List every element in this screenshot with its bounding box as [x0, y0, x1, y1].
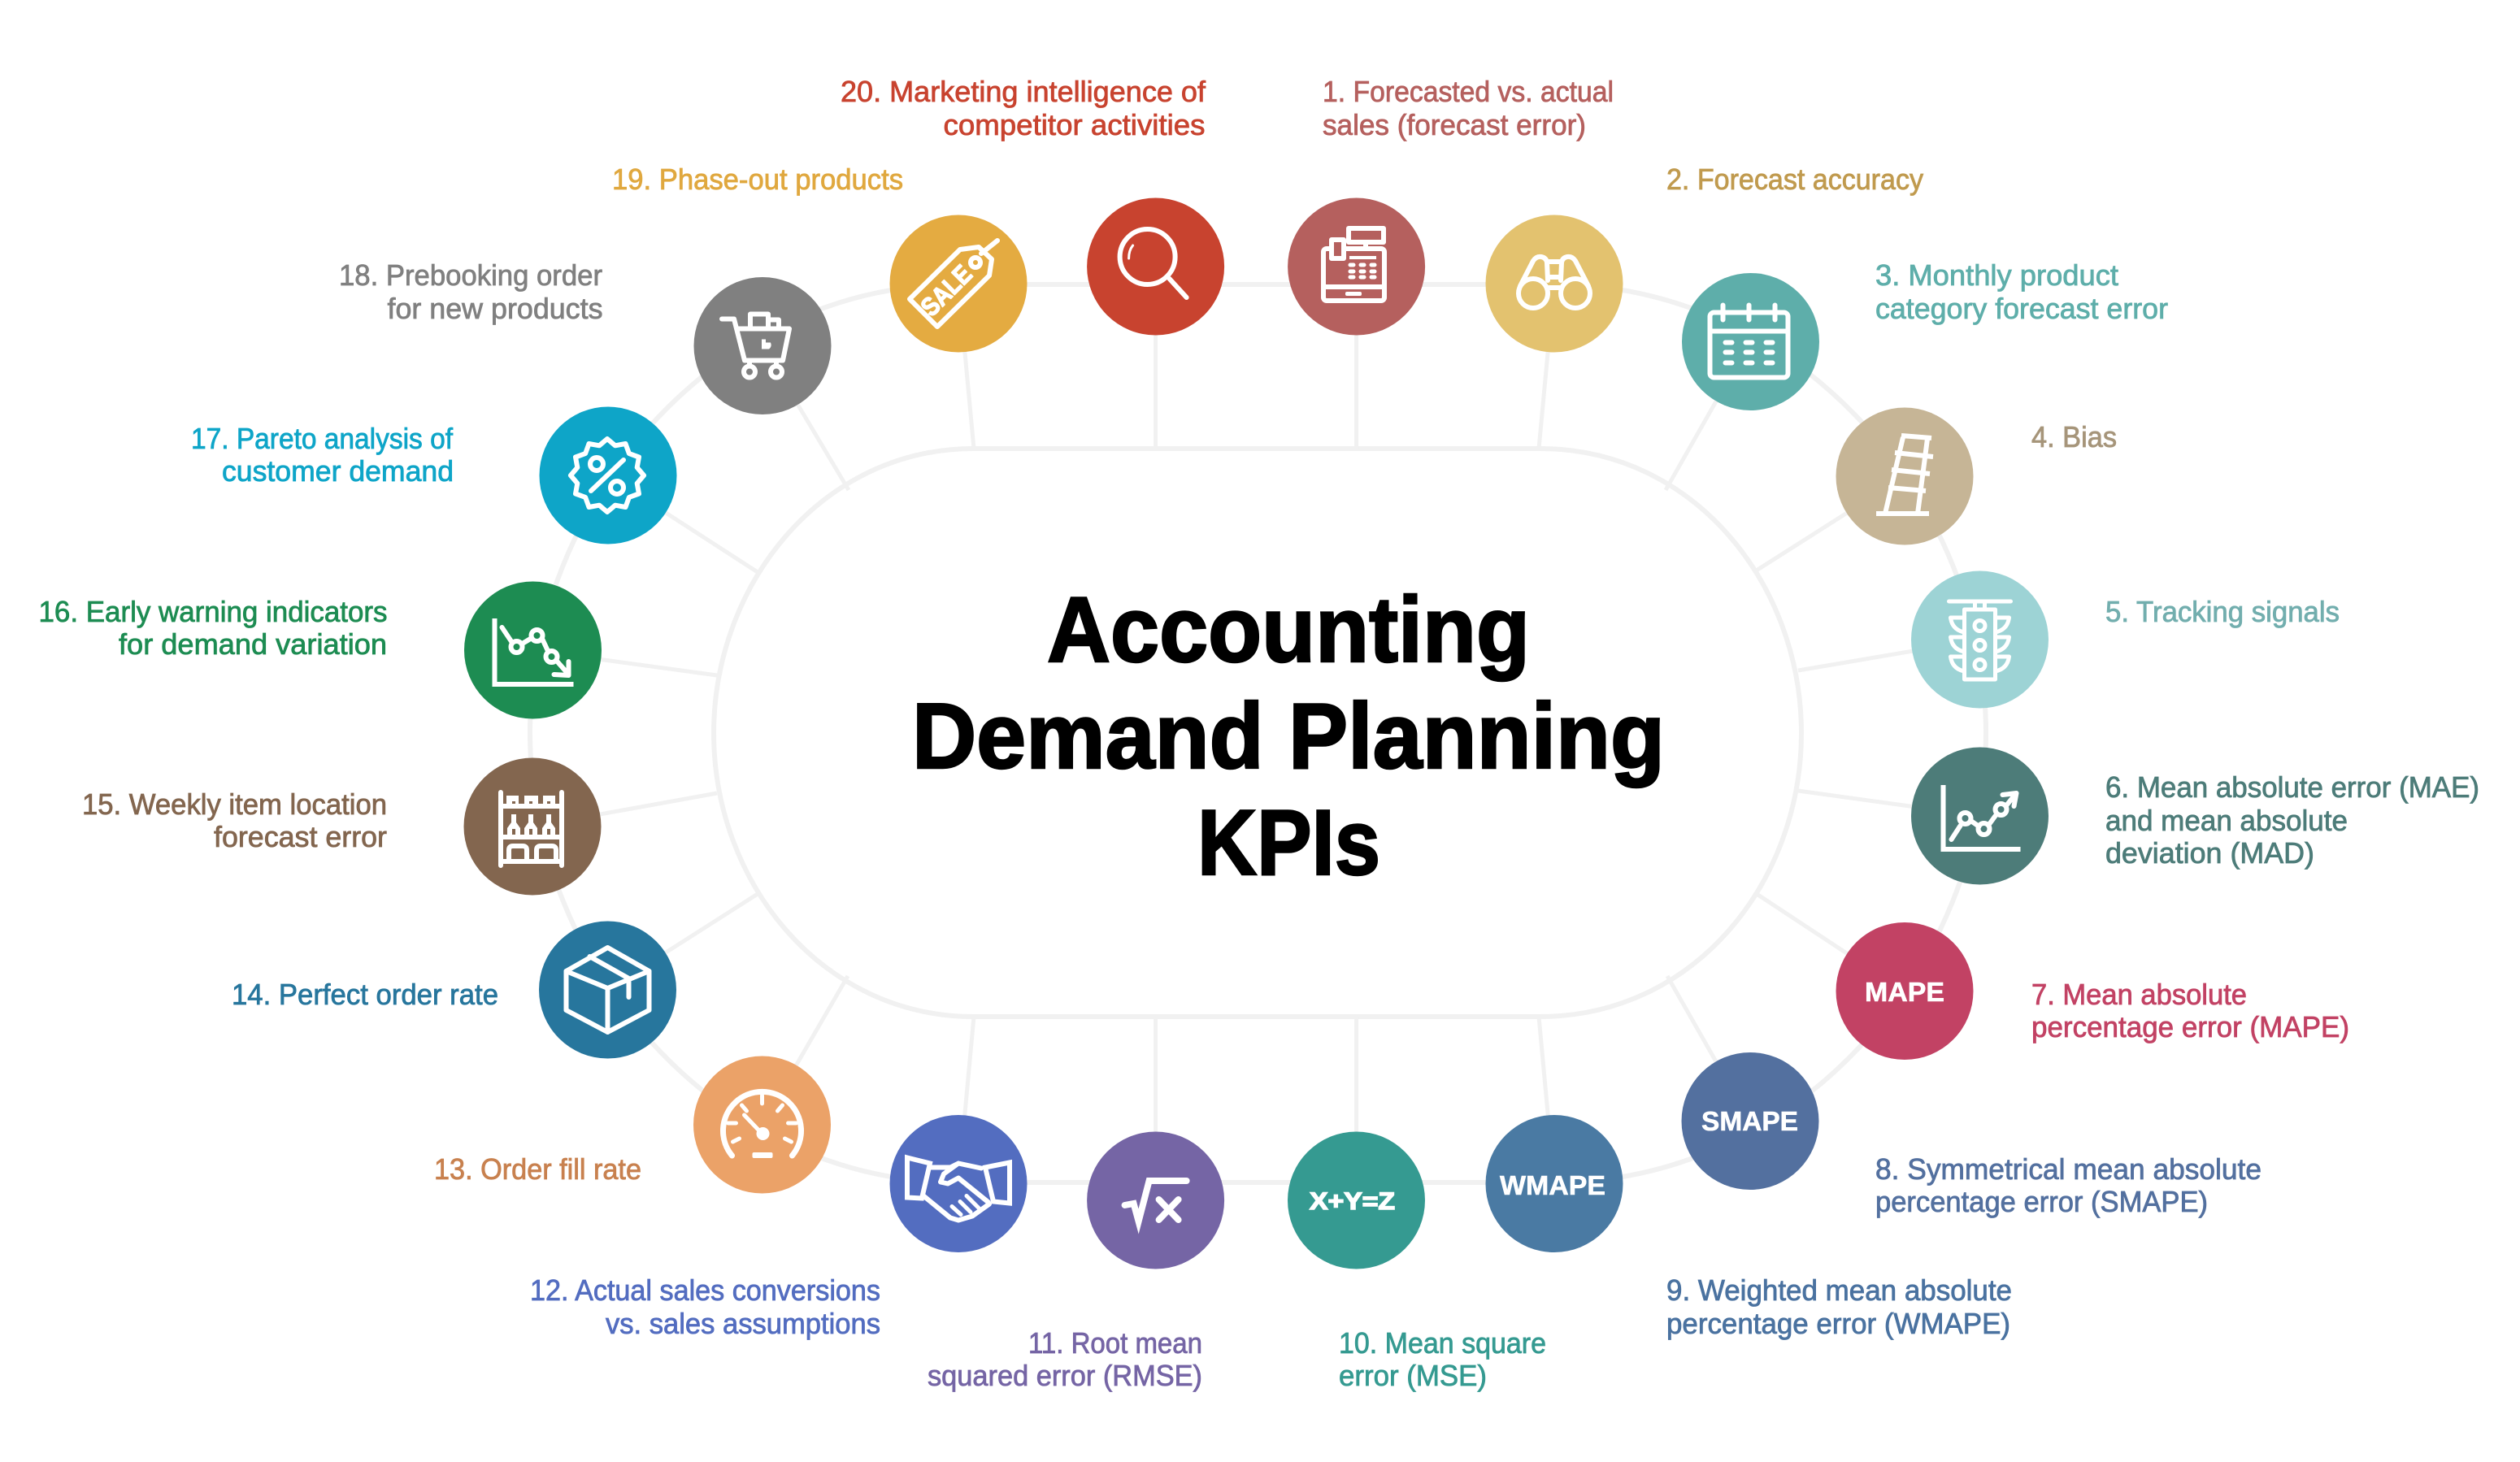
KPI 7: MAPE — [1836, 922, 2349, 1060]
icon: sale tag: SALE — [915, 259, 978, 322]
icon: rising line chart — [1943, 785, 2021, 849]
label: deviation (MAD) — [2105, 836, 2314, 870]
icon: speedometer — [723, 1091, 802, 1158]
label: sales (forecast error) — [1323, 108, 1586, 141]
label — [841, 75, 1206, 141]
icon: magnifying glass — [1120, 229, 1187, 297]
title: Demand Planning — [912, 685, 1665, 788]
label: 18. Prebooking order — [339, 258, 602, 292]
badge text: X+Y=Z: X+Y=Z — [1310, 1188, 1395, 1215]
badge text: SMAPE: SMAPE — [1701, 1106, 1798, 1136]
badge text: WMAPE: WMAPE — [1500, 1170, 1605, 1200]
KPI 19: phase-out products — [612, 163, 1028, 353]
KPI 2: forecast accuracy — [1486, 163, 1923, 353]
KPI 16: early warning indicators — [39, 582, 602, 718]
icon: percent badge — [571, 439, 644, 512]
label — [339, 258, 603, 325]
icon: falling line chart — [494, 618, 574, 684]
KPI 15: weekly item location forecast error — [82, 757, 602, 896]
icon: traffic light — [1949, 601, 2011, 679]
icon: shopping cart — [722, 314, 789, 377]
connector network: outer ring, inner stadium and spokes — [530, 267, 1986, 1200]
icon: cash register — [1323, 228, 1384, 301]
label: 13. Order fill rate — [434, 1152, 641, 1186]
KPI 17: Pareto analysis — [191, 406, 676, 544]
label: 7. Mean absolute — [2031, 978, 2247, 1011]
label: 12. Actual sales conversions — [530, 1273, 880, 1307]
label: 11. Root mean — [1028, 1326, 1202, 1360]
KPI 4: bias — [1836, 408, 2117, 544]
KPI 5: tracking signals — [1911, 570, 2340, 709]
label: 16. Early warning indicators — [39, 595, 387, 628]
label — [191, 422, 454, 488]
icon: square root of x — [1125, 1181, 1187, 1221]
label — [39, 595, 387, 661]
label: 1. Forecasted vs. actual — [1323, 75, 1614, 108]
label: 14. Perfect order rate — [232, 978, 498, 1011]
label: 9. Weighted mean absolute — [1666, 1273, 2012, 1307]
title — [912, 579, 1665, 895]
label — [2105, 770, 2479, 870]
icon: box — [566, 948, 649, 1032]
label: for new products — [387, 292, 603, 325]
icon: binoculars — [1519, 257, 1590, 308]
label: 6. Mean absolute error (MAE) — [2105, 770, 2479, 804]
label: customer demand — [222, 454, 454, 488]
KPI 20: marketing intelligence — [841, 75, 1224, 335]
KPI 13: order fill rate — [434, 1056, 831, 1193]
icon: storage shelf — [501, 792, 562, 865]
label: 17. Pareto analysis of — [191, 422, 454, 455]
label: 15. Weekly item location — [82, 787, 387, 821]
KPI 9: WMAPE — [1486, 1115, 2012, 1340]
label: percentage error (WMAPE) — [1666, 1307, 2010, 1340]
label — [1339, 1326, 1546, 1392]
KPI 10: MSE — [1288, 1131, 1546, 1392]
label: vs. sales assumptions — [606, 1307, 880, 1340]
KPI 14: perfect order rate — [232, 922, 676, 1058]
icon: leaning tower — [1876, 436, 1933, 514]
icon: sale tag — [910, 241, 997, 327]
label: 4. Bias — [2031, 420, 2117, 453]
label — [2031, 978, 2349, 1043]
label: 5. Tracking signals — [2105, 595, 2340, 628]
title: KPIs — [1197, 792, 1380, 895]
label: error (MSE) — [1339, 1359, 1487, 1392]
label — [1323, 75, 1614, 141]
label: competitor activities — [943, 108, 1205, 141]
label — [82, 787, 387, 853]
label — [1875, 258, 2168, 325]
KPI 12: sales conversions — [530, 1115, 1028, 1340]
badge text: MAPE: MAPE — [1865, 977, 1944, 1007]
label: 3. Monthly product — [1875, 258, 2118, 292]
label: 20. Marketing intelligence of — [841, 75, 1206, 108]
label: category forecast error — [1875, 292, 2168, 325]
label — [530, 1273, 880, 1340]
KPI 1: forecasted vs actual sales — [1288, 75, 1614, 335]
KPI 18: prebooking order — [339, 258, 831, 414]
label: for demand variation — [119, 627, 387, 661]
icon: calendar — [1710, 306, 1788, 377]
label: 19. Phase-out products — [612, 163, 903, 196]
label: 2. Forecast accuracy — [1666, 163, 1923, 196]
label — [1666, 1273, 2012, 1340]
label: percentage error (MAPE) — [2031, 1010, 2349, 1043]
label — [1875, 1152, 2261, 1218]
label: forecast error — [214, 820, 387, 853]
label — [928, 1326, 1202, 1392]
label: 8. Symmetrical mean absolute — [1875, 1152, 2261, 1186]
KPI 6: MAE and MAD — [1911, 748, 2479, 884]
KPI 3: monthly product category forecast error — [1682, 258, 2168, 410]
label: squared error (RMSE) — [928, 1359, 1202, 1392]
label: 10. Mean square — [1339, 1326, 1546, 1360]
icon: handshake — [907, 1157, 1010, 1221]
title: Accounting — [1047, 579, 1530, 682]
label: percentage error (SMAPE) — [1875, 1185, 2208, 1218]
KPI 8: SMAPE — [1681, 1052, 2261, 1218]
label: and mean absolute — [2105, 804, 2348, 837]
KPI 11: RMSE — [928, 1131, 1224, 1392]
